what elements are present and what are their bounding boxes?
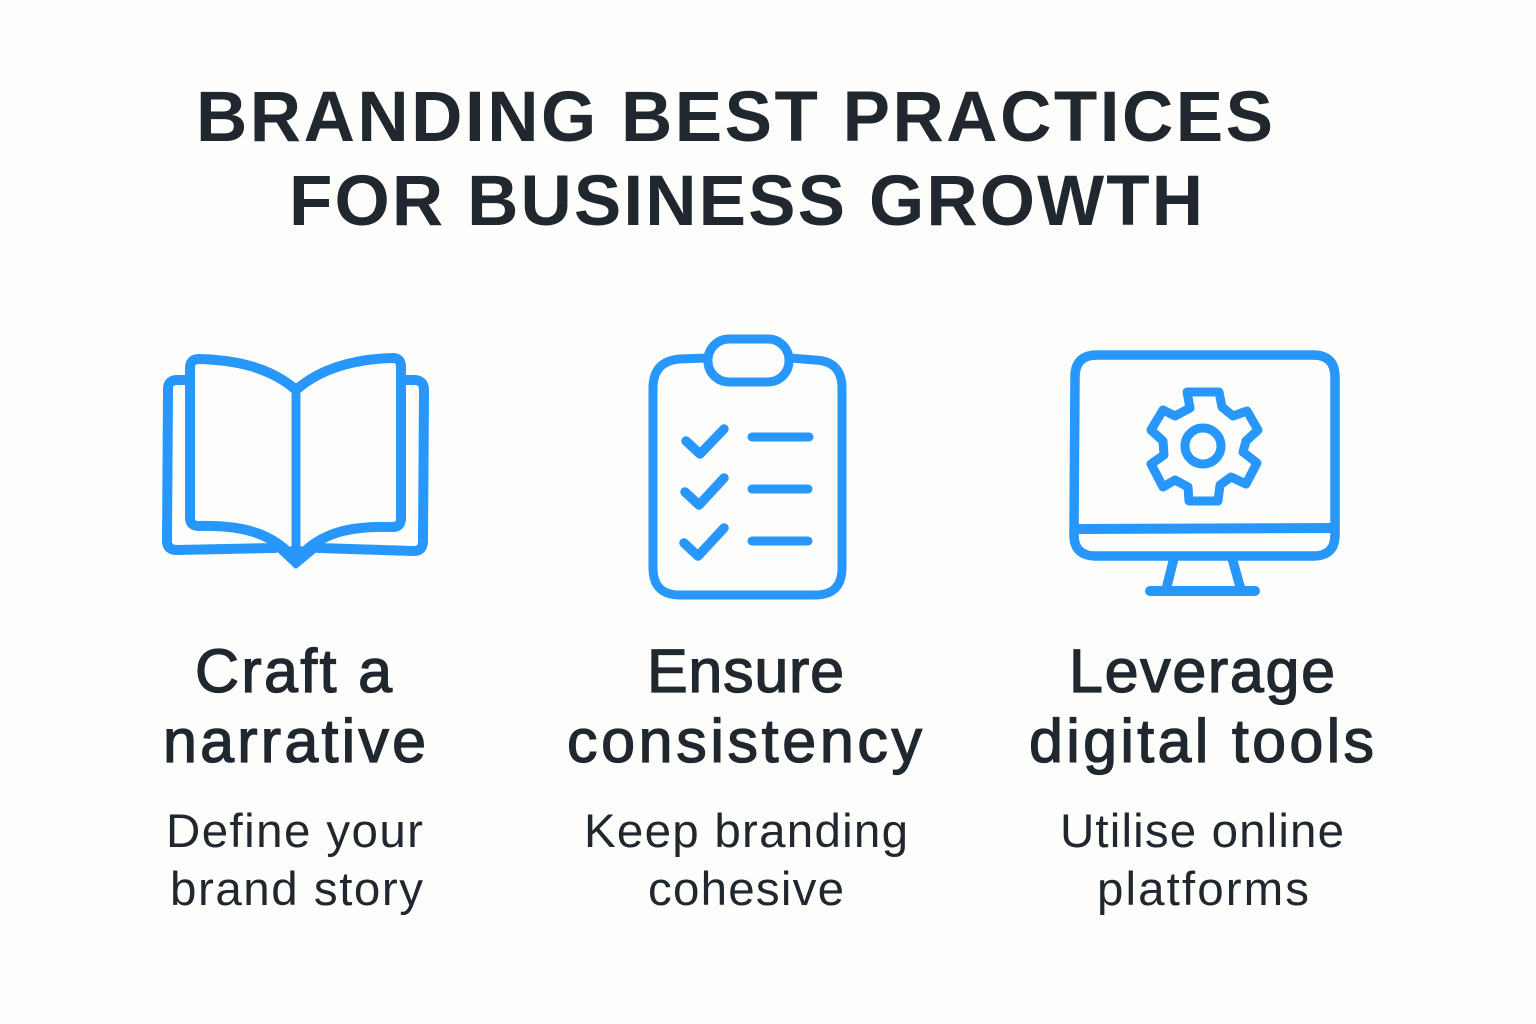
description xyxy=(166,805,423,916)
panel: craft a narrative xyxy=(163,358,426,916)
heading: narrative xyxy=(163,707,426,775)
description: Utilise online xyxy=(1060,805,1344,858)
panel: ensure consistency xyxy=(567,339,922,916)
description xyxy=(1060,805,1344,916)
heading: Craft a xyxy=(195,637,392,705)
title xyxy=(196,78,1273,241)
title: BRANDING BEST PRACTICES xyxy=(196,78,1273,157)
heading xyxy=(163,637,426,775)
description: cohesive xyxy=(648,863,844,916)
description: Define your xyxy=(166,805,423,858)
icon: monitor with gear xyxy=(1074,355,1335,591)
description xyxy=(584,805,908,916)
heading: consistency xyxy=(567,707,922,775)
description: brand story xyxy=(170,863,423,916)
title: FOR BUSINESS GROWTH xyxy=(289,162,1203,241)
heading: Leverage xyxy=(1069,637,1335,705)
icon: open book xyxy=(167,358,424,566)
heading xyxy=(1029,637,1374,775)
description: platforms xyxy=(1097,863,1309,916)
icon: gear xyxy=(1151,392,1258,501)
heading xyxy=(567,637,922,775)
panel: leverage digital tools xyxy=(1029,355,1374,916)
heading: digital tools xyxy=(1029,707,1374,775)
heading: Ensure xyxy=(647,637,844,705)
description: Keep branding xyxy=(584,805,908,858)
icon: clipboard checklist xyxy=(653,339,842,595)
